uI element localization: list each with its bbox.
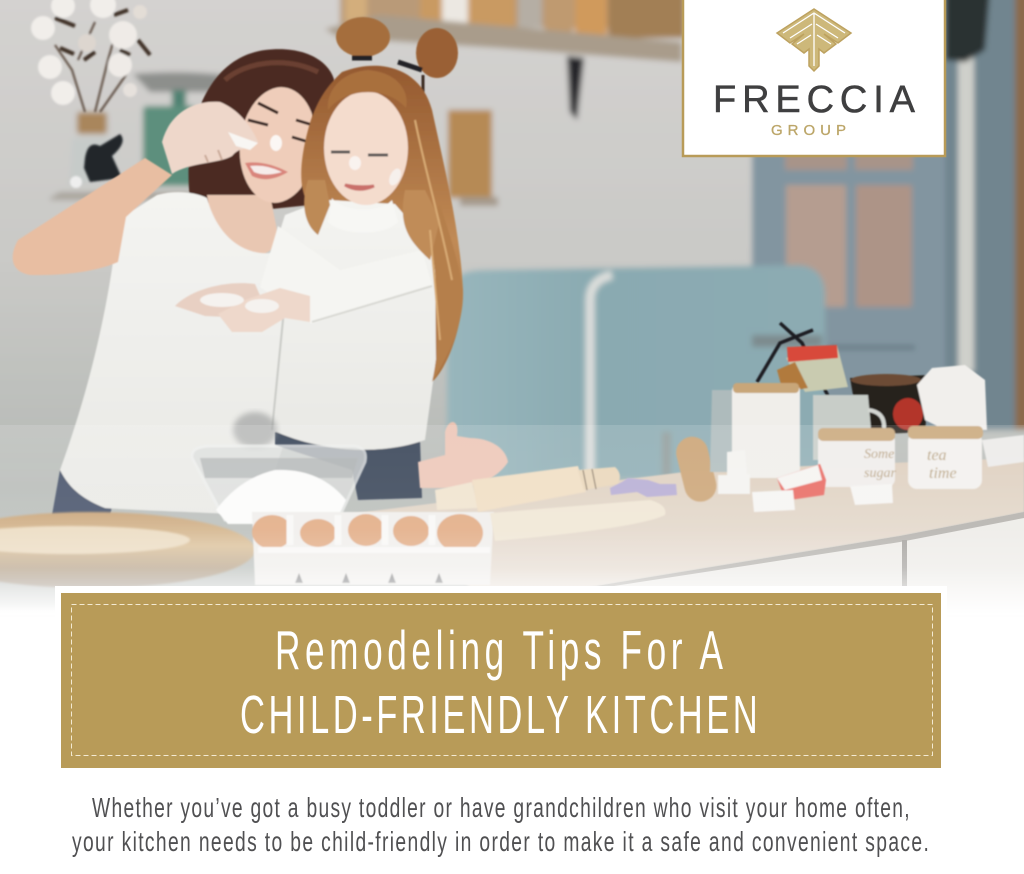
jars and canisters: tea (927, 447, 947, 464)
intro text: your kitchen needs to be child-friendly in order to make it a safe and convenient space. (72, 828, 929, 858)
title line 2: CHILD-FRIENDLY KITCHEN (240, 684, 758, 745)
wicker basket and lower shelf (448, 110, 498, 206)
wooden pin (673, 433, 720, 505)
white fade overlay (0, 425, 1024, 615)
golden tray (0, 512, 255, 588)
icon: cotton branches (31, 0, 150, 188)
daughter hair buns (336, 17, 458, 125)
intro text (72, 794, 929, 858)
kitchen scale (50, 72, 226, 200)
glass bowl of flour (192, 446, 366, 524)
jars and canisters: time (929, 465, 957, 482)
logo wordmark: FRECCIA (713, 79, 916, 121)
mother face (234, 83, 322, 207)
star cutters (610, 478, 677, 497)
title banner (55, 586, 947, 776)
kitchen background (0, 0, 1024, 610)
counter and cabinets (340, 458, 1024, 612)
figure: mother (13, 49, 336, 515)
title line 1: Remodeling Tips For A (275, 619, 723, 681)
daughter's hands (175, 283, 310, 332)
icon: Freccia arrow mark (777, 9, 851, 71)
jars and canisters (710, 323, 1024, 489)
mother's floured left hand (418, 422, 508, 488)
photo: mother and daughter baking in a kitchen (0, 0, 1024, 615)
rolling pin (435, 466, 620, 512)
shelf with jars (325, 0, 685, 120)
logo panel (683, 0, 945, 156)
jars and canisters: Some (864, 447, 894, 462)
flour cloud (233, 412, 277, 448)
door and right wall (752, 0, 1024, 430)
jars and canisters: sugar (864, 466, 896, 481)
daughter face (324, 70, 408, 205)
figure: daughter (175, 17, 463, 500)
intro text: Whether you’ve got a busy toddler or have grandchildren who visit your home often, (92, 794, 910, 824)
dough sheet (490, 500, 665, 541)
refrigerator (447, 265, 825, 480)
mother's pinching hand (162, 102, 258, 174)
cotton stem vase (70, 112, 116, 186)
egg carton (252, 512, 494, 585)
logo subtitle: GROUP (771, 122, 846, 139)
cookie cutters (718, 450, 893, 512)
